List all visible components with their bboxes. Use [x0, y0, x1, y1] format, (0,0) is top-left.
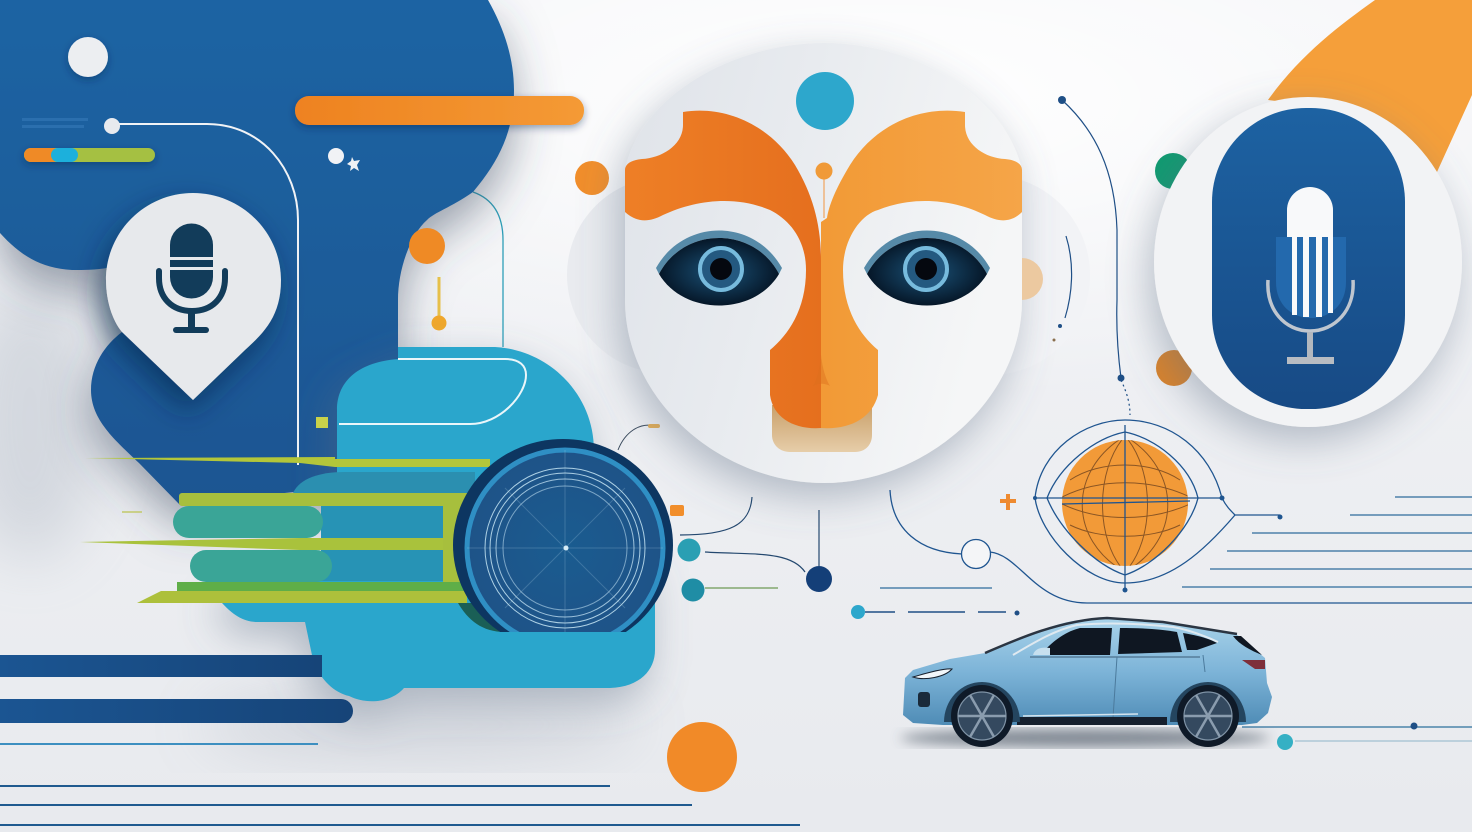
- front wheel: [944, 682, 1020, 747]
- car windows: [1040, 628, 1262, 655]
- face panel: [625, 43, 1043, 483]
- dial connector: [618, 424, 660, 450]
- large orange dot: [667, 722, 737, 792]
- blue background blob: [0, 0, 514, 505]
- car connector lines: [1242, 722, 1472, 750]
- bottom left bars: [0, 655, 800, 826]
- white connector line: [104, 118, 298, 465]
- small bars and pill at top left: [22, 118, 155, 162]
- right orange brow and nose: [821, 111, 1022, 428]
- globe orbit lines: [1033, 420, 1282, 592]
- car details: [913, 648, 1265, 721]
- icon: striped microphone: [1268, 187, 1353, 364]
- node connectors at centre: [678, 497, 832, 602]
- small orange dot by face: [575, 161, 609, 195]
- dashed line with dots: [851, 605, 1020, 619]
- car: [900, 618, 1272, 747]
- blue microphone pill: [1212, 108, 1405, 409]
- car silver trim: [1013, 624, 1218, 655]
- nose crease: [813, 355, 830, 386]
- small orange plus: [1000, 494, 1016, 510]
- green sliver under dial: [458, 603, 505, 632]
- green and orange side dots: [1155, 153, 1192, 386]
- left orange brow and nose: [625, 111, 821, 428]
- left eye: [656, 230, 782, 306]
- top right orange shape: [1268, 0, 1472, 172]
- rear wheel: [1170, 682, 1246, 747]
- car shadow: [900, 729, 1270, 747]
- speed stripes and teal pills: [80, 457, 490, 603]
- car roof: [985, 618, 1237, 653]
- dial rings: [467, 450, 663, 646]
- teal arch behind blob: [473, 192, 503, 347]
- orange connector beside blob: [409, 228, 446, 330]
- cyan head blob: [222, 347, 655, 701]
- right side data lines: [880, 497, 1472, 588]
- sparkle dots: [328, 148, 360, 171]
- orange globe: [1033, 420, 1282, 592]
- face backing disc: [567, 175, 1090, 375]
- pin with microphone: [106, 193, 281, 400]
- white dot top left: [68, 37, 108, 77]
- right eye: [864, 230, 990, 306]
- orange antenna: [816, 162, 832, 218]
- curved connector with dots: [1052, 96, 1130, 415]
- cyan forehead dot: [796, 72, 854, 130]
- car body: [903, 618, 1272, 725]
- circular radar dial: [453, 439, 673, 651]
- circle node connector: [890, 490, 1472, 603]
- nose shadow base: [772, 405, 872, 452]
- white microphone disc: [1154, 97, 1462, 427]
- orange bar: [295, 96, 584, 125]
- ear tab: [1022, 258, 1043, 300]
- orange dash beside dial: [670, 505, 684, 516]
- white line inside cyan blob: [339, 359, 526, 424]
- yellow square: [316, 417, 328, 428]
- icon: microphone in pin: [159, 224, 225, 333]
